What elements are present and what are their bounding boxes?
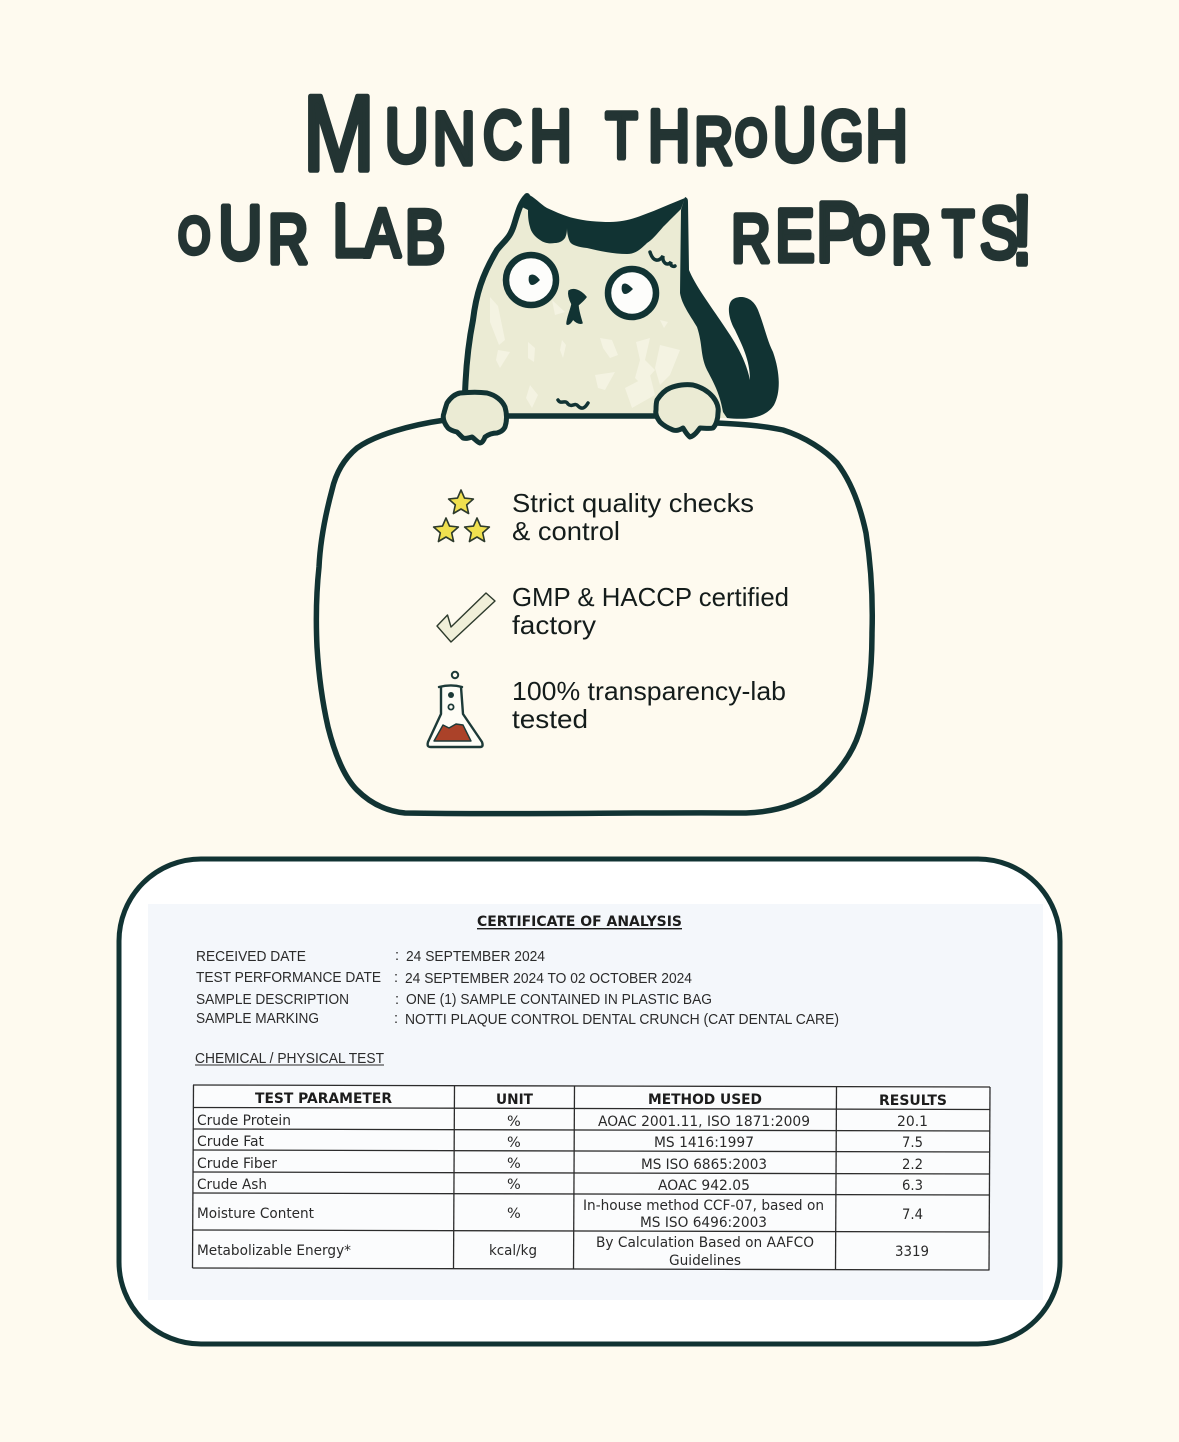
title: O: [178, 207, 210, 264]
sample details: :: [394, 970, 398, 986]
table rows: 7.4: [902, 1207, 923, 1223]
title: T: [606, 101, 637, 172]
text: transparency lab tested: tested: [512, 704, 588, 734]
table rows: [197, 1113, 929, 1269]
table rows: %: [507, 1177, 521, 1193]
title: R: [694, 103, 733, 178]
icon: check mark: [437, 593, 495, 642]
title: P: [816, 186, 861, 280]
title: C: [483, 97, 522, 172]
text: transparency lab tested: [512, 676, 786, 734]
table rows: Crude Protein: [197, 1113, 291, 1129]
title: H: [530, 96, 572, 178]
text: GMP and HACCP certified: GMP & HACCP certified: [512, 582, 789, 612]
eyelash: [650, 252, 675, 266]
table rows: MS 1416:1997: [654, 1135, 754, 1151]
sample details: SAMPLE DESCRIPTION: [196, 992, 349, 1008]
cat tail and back: [680, 197, 779, 419]
table header: TEST PARAMETER: [255, 1091, 392, 1107]
table rows: By Calculation Based on AAFCO: [596, 1235, 814, 1251]
text: strict quality checks: Strict quality checks: [512, 488, 754, 518]
text: transparency lab tested: 100% transparency-lab: [512, 676, 786, 706]
title: O: [735, 109, 767, 166]
sample details: :: [395, 992, 399, 1008]
sample details: 24 SEPTEMBER 2024: [406, 949, 545, 965]
table rows: %: [507, 1114, 521, 1130]
title: U: [218, 191, 262, 276]
table header: [255, 1091, 947, 1109]
sample details: NOTTI PLAQUE CONTROL DENTAL CRUNCH (CAT DENTAL CARE): [405, 1012, 839, 1028]
results table: [192, 1085, 990, 1270]
sample details: :: [395, 948, 399, 964]
sample details: SAMPLE MARKING: [196, 1011, 319, 1027]
table rows: AOAC 2001.11, ISO 1871:2009: [598, 1114, 810, 1130]
icon: three stars: [434, 490, 489, 542]
table rows: Crude Fiber: [197, 1156, 277, 1172]
table rows: Moisture Content: [197, 1206, 314, 1222]
table rows: %: [507, 1156, 521, 1172]
title: G: [821, 97, 864, 174]
table header: METHOD USED: [648, 1092, 762, 1108]
speech board: [316, 416, 872, 814]
sample details: ONE (1) SAMPLE CONTAINED IN PLASTIC BAG: [406, 992, 712, 1008]
title: !: [1011, 176, 1033, 285]
icon: lab flask: [428, 672, 483, 747]
table rows: 6.3: [902, 1178, 923, 1194]
table rows: Crude Fat: [197, 1134, 264, 1150]
right eye: [608, 269, 656, 317]
title: H: [648, 96, 690, 178]
table rows: Metabolizable Energy*: [197, 1243, 351, 1259]
text: strict quality checks: & control: [512, 516, 620, 546]
cat body: [465, 198, 726, 418]
right pupil: [622, 284, 632, 293]
title: B: [405, 195, 445, 280]
title: U: [773, 93, 817, 178]
title: M: [303, 73, 374, 193]
title: A: [364, 195, 400, 271]
table rows: 7.5: [902, 1135, 923, 1151]
title: R: [891, 201, 931, 278]
cat mouth squiggle: [558, 400, 588, 408]
title: [178, 73, 1033, 285]
sample details: [196, 948, 839, 1028]
table rows: kcal/kg: [489, 1243, 537, 1259]
table rows: %: [507, 1206, 521, 1222]
title: N: [433, 98, 476, 181]
panel: certificate frame: [119, 859, 1060, 1344]
title: T: [942, 199, 974, 270]
cat head patch: [522, 194, 685, 254]
text: GMP and HACCP certified: [512, 582, 789, 640]
title: E: [775, 195, 815, 278]
cat illustration: [465, 194, 779, 419]
table rows: 3319: [895, 1244, 929, 1260]
table rows: 20.1: [897, 1114, 928, 1130]
sample details: :: [394, 1011, 398, 1027]
left paw: [443, 392, 506, 443]
title: H: [866, 96, 908, 178]
title: U: [385, 94, 429, 179]
table rows: AOAC 942.05: [658, 1178, 750, 1194]
text: GMP and HACCP certified: factory: [512, 610, 596, 640]
cat fur texture: [490, 297, 680, 408]
sample details: 24 SEPTEMBER 2024 TO 02 OCTOBER 2024: [405, 971, 692, 987]
table rows: MS ISO 6496:2003: [640, 1215, 767, 1231]
left pupil: [529, 275, 539, 284]
table rows: Guidelines: [669, 1253, 741, 1269]
table rows: %: [507, 1135, 521, 1151]
title: R: [731, 201, 770, 277]
table rows: In-house method CCF-07, based on: [583, 1198, 824, 1214]
title: R: [268, 201, 308, 278]
text: strict quality checks: [512, 488, 754, 546]
certificate heading: CERTIFICATE OF ANALYSIS: [477, 914, 682, 930]
title: S: [980, 193, 1018, 273]
left eye: [506, 255, 556, 305]
table header: UNIT: [496, 1092, 533, 1108]
certificate scan: [148, 904, 1043, 1300]
sample details: TEST PERFORMANCE DATE: [196, 970, 381, 986]
cat outline left: [465, 196, 527, 395]
table rows: MS ISO 6865:2003: [641, 1157, 767, 1173]
right paw: [656, 385, 718, 437]
title: O: [853, 206, 885, 264]
section heading: chemical physical test: CHEMICAL / PHYSICAL TEST: [195, 1051, 384, 1067]
cat nose: [567, 290, 586, 324]
table header: RESULTS: [879, 1093, 947, 1109]
title: L: [333, 190, 366, 273]
table rows: 2.2: [902, 1157, 923, 1173]
sample details: RECEIVED DATE: [196, 949, 306, 965]
table rows: Crude Ash: [197, 1177, 267, 1193]
